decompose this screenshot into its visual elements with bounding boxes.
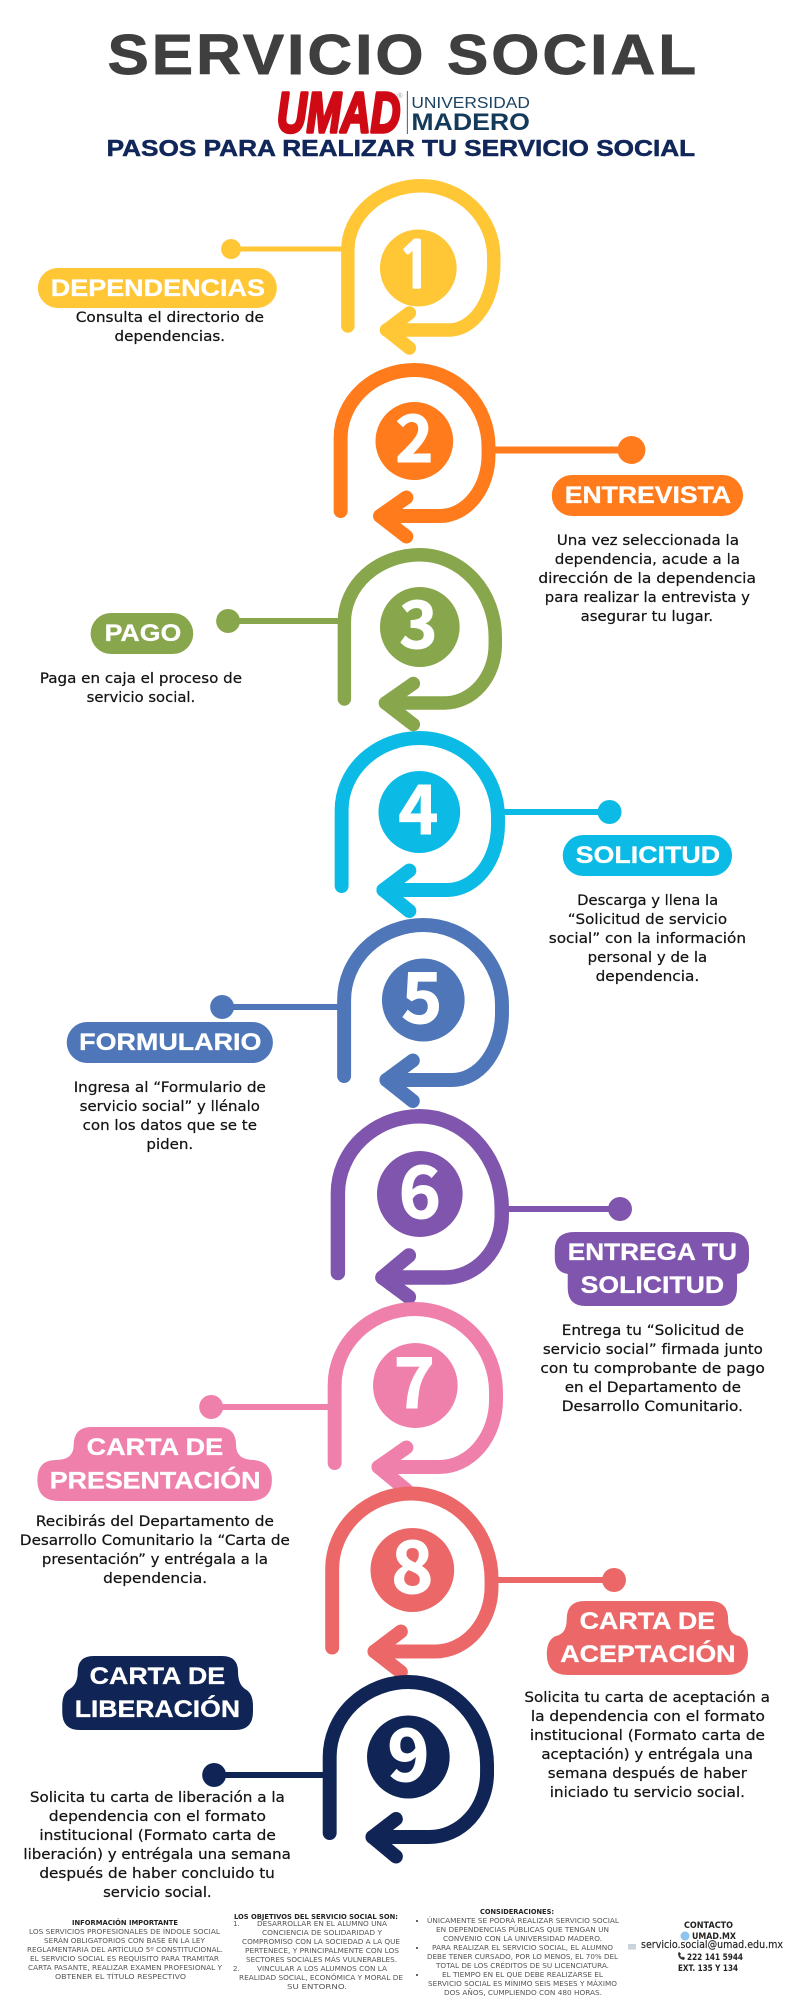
footer: informacion importante: SERÁN OBLIGATORIOS CON BASE EN LA LEY	[44, 1936, 206, 1945]
description 4	[549, 893, 746, 985]
step 9: carta de liberacion	[23, 1656, 487, 1901]
loop arrow 4	[342, 738, 498, 911]
connector 2	[488, 436, 645, 464]
connector 3	[216, 609, 346, 633]
footer: informacion importante: EL SERVICIO SOCIAL ES REQUISITO PARA TRAMITAR	[30, 1955, 219, 1963]
footer: objetivos: 2.	[233, 1965, 240, 1973]
footer: contacto: CONTACTO	[684, 1921, 733, 1931]
footer: consideraciones: DOS AÑOS, CUMPLIENDO CON 480 HORAS.	[444, 1988, 602, 1997]
heading pill 8: CARTA DE	[580, 1608, 715, 1635]
description 9: dependencia con el formato	[49, 1809, 266, 1825]
footer: contacto: EXT. 135 Y 134	[678, 1964, 738, 1974]
number circle 3	[380, 573, 460, 667]
connector 5	[210, 995, 344, 1019]
description 9: liberación) y entrégala una semana	[23, 1847, 291, 1863]
footer: objetivos: LOS OBJETIVOS DEL SERVICIO SOCIAL SON:	[234, 1912, 398, 1921]
number circle 4	[378, 755, 460, 854]
description 5: Ingresa al “Formulario de	[74, 1080, 266, 1096]
heading pill 3: PAGO	[105, 620, 181, 647]
heading pill 6: ENTREGA TU	[568, 1239, 737, 1266]
title: SERVICIO SOCIAL	[108, 24, 699, 87]
loop arrow 7	[335, 1309, 496, 1490]
icon: phone	[678, 1952, 685, 1960]
footer: contacto: 222 141 5944	[687, 1953, 743, 1963]
loop arrow 1	[348, 186, 494, 348]
logo: UMAD Universidad Madero: UMAD	[277, 82, 400, 145]
number circle 8: 8	[391, 1510, 433, 1614]
description 4: Descarga y llena la	[577, 893, 718, 909]
description 7: Recibirás del Departamento de	[36, 1514, 274, 1530]
heading pill 7: CARTA DE	[87, 1434, 223, 1461]
description 5: con los datos que se te	[83, 1118, 257, 1134]
number circle 2: 2	[395, 387, 433, 481]
description 6: Desarrollo Comunitario.	[562, 1399, 743, 1415]
number circle 6: 6	[399, 1135, 441, 1239]
description 3	[40, 671, 242, 706]
number circle 5	[382, 943, 465, 1044]
footer: contacto: servicio.social@umad.edu.mx	[641, 1939, 783, 1951]
heading pill 7	[37, 1427, 272, 1501]
connector 4	[498, 800, 622, 824]
footer: objetivos: REALIDAD SOCIAL, ECONÓMICA Y MORAL DE	[239, 1973, 403, 1982]
footer: consideraciones: ÚNICAMENTE SE PODRÁ REALIZAR SERVICIO SOCIAL	[427, 1916, 619, 1925]
loop arrow 5	[344, 925, 502, 1101]
description 1: dependencias.	[115, 329, 225, 345]
footer: objetivos: PERTENECE, Y PRINCIPALMENTE CON LOS	[245, 1947, 400, 1955]
loop arrow 8	[332, 1494, 492, 1672]
description 6: en el Departamento de	[565, 1380, 741, 1396]
footer: informacion importante	[27, 1918, 223, 1981]
footer: consideraciones: CONVENIO CON LA UNIVERSIDAD MADERO.	[443, 1935, 602, 1943]
heading pill 4: SOLICITUD	[576, 842, 720, 869]
heading pill 7: PRESENTACIÓN	[50, 1466, 260, 1495]
description 6: servicio social” firmada junto	[543, 1342, 763, 1358]
description 7: dependencia.	[103, 1571, 207, 1587]
heading pill 5	[67, 1022, 273, 1063]
description 1: Consulta el directorio de	[76, 310, 264, 326]
heading pill 9: LIBERACIÓN	[75, 1695, 240, 1723]
footer: objetivos	[233, 1912, 403, 1991]
footer: consideraciones: PARA REALIZAR EL SERVICIO SOCIAL, EL ALUMNO	[432, 1944, 613, 1952]
description 7: Desarrollo Comunitario la “Carta de	[20, 1533, 290, 1549]
logo: UMAD Universidad Madero: UNIVERSIDAD	[411, 95, 530, 112]
icon: envelope	[628, 1944, 636, 1950]
footer: objetivos: 1.	[233, 1920, 240, 1928]
step 8: carta de aceptacion	[332, 1494, 770, 1801]
loop arrow 3	[344, 555, 495, 724]
description 5	[74, 1080, 266, 1153]
description 9: Solicita tu carta de liberación a la	[30, 1790, 285, 1806]
footer: informacion importante: REGLAMENTARIA DEL ARTÍCULO 5º CONSTITUCIONAL.	[27, 1945, 223, 1954]
heading pill 3	[91, 613, 193, 654]
step 6: entrega tu solicitud	[338, 1116, 765, 1415]
description 7	[20, 1514, 290, 1587]
number circle 6	[377, 1135, 463, 1239]
number circle 3: 3	[399, 573, 437, 667]
description 2: Una vez seleccionada la	[557, 533, 739, 549]
footer: objetivos: SECTORES SOCIALES MÁS VULNERABLES.	[246, 1955, 397, 1964]
description 3: Paga en caja el proceso de	[40, 671, 242, 687]
icon: globe	[680, 1932, 690, 1940]
footer: objetivos: SU ENTORNO.	[287, 1983, 347, 1991]
description 9	[23, 1790, 291, 1901]
description 2: dependencia, acude a la	[555, 552, 740, 568]
description 8: la dependencia con el formato	[531, 1709, 765, 1725]
footer: consideraciones: TOTAL DE LOS CRÉDITOS DE SU LICENCIATURA.	[435, 1961, 609, 1970]
heading pill 9: CARTA DE	[90, 1663, 225, 1690]
heading pill 9	[62, 1656, 253, 1730]
step 4: solicitud	[342, 738, 746, 985]
subtitle: PASOS PARA REALIZAR TU SERVICIO SOCIAL	[107, 135, 695, 161]
description 1	[76, 310, 264, 345]
description 2	[538, 533, 756, 625]
description 9: después de haber concluido tu	[39, 1866, 275, 1882]
number circle 9: 9	[387, 1698, 430, 1802]
number circle 8	[371, 1510, 454, 1614]
heading pill 2: ENTREVISTA	[565, 482, 731, 509]
description 9: servicio social.	[103, 1885, 212, 1901]
description 6	[540, 1323, 765, 1415]
description 8: aceptación) y entrégala una	[541, 1747, 753, 1763]
heading pill 6	[555, 1232, 749, 1306]
heading pill 1: DEPENDENCIAS	[51, 275, 265, 302]
footer: consideraciones	[416, 1907, 619, 1997]
footer: consideraciones: EN DEPENDENCIAS PÚBLICAS QUE TENGAN UN	[436, 1925, 609, 1934]
step 1: dependencias	[38, 186, 494, 348]
heading pill 2	[552, 475, 743, 516]
description 2: dirección de la dependencia	[538, 571, 756, 587]
description 7: presentación” y entrégala a la	[42, 1552, 268, 1568]
connector 8	[492, 1568, 626, 1592]
step 3: pago	[40, 555, 495, 724]
description 8: Solicita tu carta de aceptación a	[524, 1690, 770, 1706]
step 7: carta de presentacion	[20, 1309, 496, 1587]
description 8: iniciado tu servicio social.	[550, 1785, 745, 1801]
connector 7	[199, 1395, 331, 1419]
number circle 1	[380, 230, 457, 306]
header	[107, 24, 699, 161]
number circle 9	[367, 1698, 450, 1802]
heading pill 4	[563, 835, 732, 876]
footer: objetivos: VINCULAR A LOS ALUMNOS CON LA	[257, 1965, 387, 1973]
logo: UMAD Universidad Madero	[277, 82, 530, 145]
number circle 1: 1	[396, 234, 435, 298]
footer: informacion importante: OBTENER EL TÍTULO RESPECTIVO	[55, 1972, 187, 1981]
description 5: servicio social” y llénalo	[80, 1099, 260, 1115]
description 6: Entrega tu “Solicitud de	[562, 1323, 744, 1339]
number circle 5: 5	[401, 943, 442, 1044]
description 2: asegurar tu lugar.	[581, 609, 713, 625]
footer: consideraciones: SERVICIO SOCIAL ES MÍNIMO SEIS MESES Y MÁXIMO	[428, 1979, 618, 1988]
footer: contacto: UMAD.MX	[692, 1932, 736, 1942]
footer: objetivos: CONCIENCIA DE SOLIDARIDAD Y	[262, 1929, 383, 1937]
description 4: “Solicitud de servicio	[568, 912, 727, 928]
description 2: para realizar la entrevista y	[545, 590, 750, 606]
description 3: servicio social.	[87, 690, 195, 706]
description 6: con tu comprobante de pago	[540, 1361, 765, 1377]
description 8: semana después de haber	[548, 1766, 747, 1782]
logo: UMAD Universidad Madero: MADERO	[411, 109, 530, 136]
connector 6	[502, 1197, 632, 1221]
description 8	[524, 1690, 770, 1801]
number circle 2	[375, 387, 453, 481]
logo: UMAD Universidad Madero: ®	[397, 92, 403, 100]
footer: informacion importante: INFORMACIÓN IMPORTANTE	[72, 1918, 178, 1927]
description 4: social” con la información	[549, 931, 746, 947]
footer: informacion importante: LOS SERVICIOS PROFESIONALES DE ÍNDOLE SOCIAL	[29, 1927, 220, 1936]
number circle 7: 7	[394, 1328, 435, 1429]
step 2: entrevista	[341, 370, 756, 625]
footer: objetivos: COMPROMISO CON LA SOCIEDAD A LA QUE	[242, 1938, 400, 1946]
description 5: piden.	[146, 1137, 193, 1153]
loop arrow 9	[330, 1682, 487, 1856]
loop arrow 6	[338, 1116, 502, 1297]
footer: consideraciones: DEBE TENER CURSADO, POR LO MENOS, EL 70% DEL	[427, 1953, 618, 1961]
heading pill 1	[38, 268, 277, 308]
number circle 4: 4	[398, 755, 438, 854]
description 8: institucional (Formato carta de	[530, 1728, 765, 1744]
footer: consideraciones: CONSIDERACIONES:	[480, 1907, 554, 1916]
footer: consideraciones: EL TIEMPO EN EL QUE DEBE REALIZARSE EL	[442, 1971, 603, 1979]
heading pill 5: FORMULARIO	[79, 1029, 261, 1056]
description 4: personal y de la	[588, 950, 707, 966]
footer: contacto	[628, 1921, 783, 1974]
connector 9	[202, 1763, 332, 1787]
footer: objetivos: DESARROLLAR EN EL ALUMNO UNA	[257, 1920, 387, 1928]
number circle 7	[373, 1328, 458, 1429]
heading pill 6: SOLICITUD	[581, 1272, 724, 1299]
heading pill 8: ACEPTACIÓN	[560, 1640, 736, 1668]
footer: informacion importante: CARTA PASANTE, REALIZAR EXAMEN PROFESIONAL Y	[28, 1964, 223, 1972]
connector 1	[221, 239, 343, 259]
heading pill 8	[547, 1601, 748, 1675]
description 4: dependencia.	[596, 969, 699, 985]
step 5: formulario	[67, 925, 502, 1153]
loop arrow 2	[341, 370, 489, 536]
description 9: institucional (Formato carta de	[39, 1828, 276, 1844]
